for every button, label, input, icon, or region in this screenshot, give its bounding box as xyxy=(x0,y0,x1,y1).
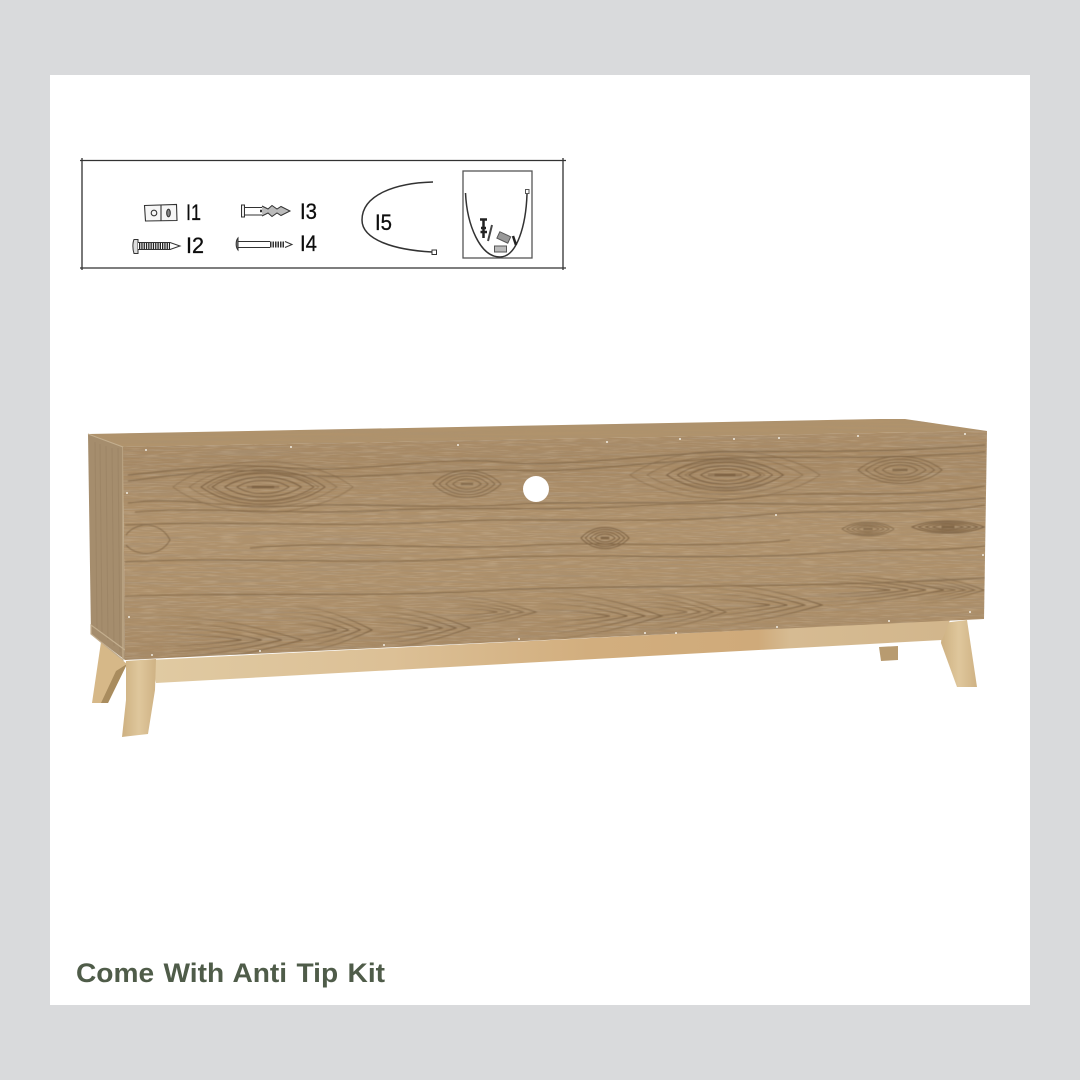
back-right small leg xyxy=(879,646,898,661)
panel: TV cabinet back view xyxy=(88,418,990,737)
label: I5: I5 xyxy=(375,210,392,235)
cabinet top surface xyxy=(88,418,988,448)
label: I2: I2 xyxy=(186,233,204,258)
front-left leg xyxy=(122,659,156,737)
cabinet back panel with wood grain xyxy=(120,428,990,664)
wooden base rail xyxy=(150,620,950,683)
icon: part I1 bracket xyxy=(144,204,177,221)
panel: anti tip kit parts diagram xyxy=(80,158,566,270)
icon: part I5 strap cable xyxy=(362,182,436,254)
right front leg xyxy=(941,620,977,687)
parts box frame xyxy=(80,158,566,270)
white card panel xyxy=(50,75,1030,1005)
label: I1: I1 xyxy=(186,200,201,225)
cable hole xyxy=(523,476,549,502)
icon: part I4 long screw xyxy=(236,238,292,250)
label: I3: I3 xyxy=(300,199,317,224)
caption: Come With Anti Tip Kit xyxy=(76,958,385,988)
label: I4: I4 xyxy=(300,231,317,256)
back-left leg xyxy=(92,642,127,703)
icon: part I3 wall anchor xyxy=(242,205,290,217)
icon: part I2 screw xyxy=(133,240,180,254)
cabinet side panel xyxy=(88,434,125,660)
icon: packaged kit bag xyxy=(463,171,532,258)
mounting pin holes xyxy=(126,433,984,656)
